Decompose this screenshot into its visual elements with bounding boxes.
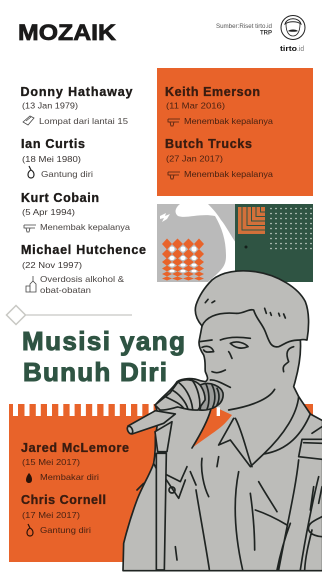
entry: Chris Cornell: Gantung diri: [40, 525, 91, 535]
ear: [283, 347, 294, 372]
entry: Butch Trucks: Menembak kepalanya: [184, 169, 273, 179]
entry: Donny Hathaway: (13 Jan 1979): [22, 100, 78, 110]
microphone: [128, 411, 175, 434]
entry: Keith Emerson: [165, 85, 273, 126]
green square: [235, 204, 313, 282]
icon: flame: [26, 473, 32, 483]
face: [199, 337, 250, 387]
entry: Butch Trucks: (27 Jan 2017): [166, 154, 223, 164]
hair line: [202, 310, 300, 347]
entry: Jared McLemore: (15 Mei 2017): [22, 457, 80, 467]
title: Musisi yang: [22, 326, 185, 356]
divider with diamond: [6, 306, 132, 324]
panel: bottom orange: [9, 404, 313, 562]
shirt folds: [137, 457, 322, 570]
icon: noose: [28, 166, 34, 178]
title: [22, 326, 185, 387]
entry: Butch Trucks: [165, 137, 273, 179]
orange gap between arm and collar: [192, 407, 232, 448]
title: Bunuh Diri: [23, 357, 167, 387]
tirto logo: [280, 16, 305, 53]
entry: Donny Hathaway: [20, 85, 133, 126]
hair strands: [205, 299, 285, 318]
entry: Jared McLemore: [21, 441, 129, 483]
entry: Keith Emerson: Keith Emerson: [165, 85, 260, 99]
entry: Kurt Cobain: [21, 191, 130, 232]
tirto logo: tirto: [280, 44, 297, 53]
entry: Kurt Cobain: Kurt Cobain: [21, 191, 99, 205]
source credit: [216, 23, 273, 36]
tirto logo: .id: [297, 44, 304, 53]
entry: Ian Curtis: [21, 137, 93, 179]
entry: Michael Hutchence: Michael Hutchence: [21, 243, 146, 257]
icon: building: [23, 116, 34, 125]
entry: Michael Hutchence: [21, 243, 146, 295]
source credit: Sumber:Riset tirto.id: [216, 23, 273, 30]
entry: Butch Trucks: Butch Trucks: [165, 137, 252, 151]
entry: Keith Emerson: Menembak kepalanya: [184, 116, 273, 126]
brand wordmark: MOZAIK: [18, 20, 116, 45]
entry: Ian Curtis: Ian Curtis: [21, 137, 85, 151]
panel: top orange: [157, 68, 313, 196]
entry: Michael Hutchence: Overdosis alkohol &: [40, 274, 124, 284]
icon: noose: [27, 524, 33, 536]
entry: Donny Hathaway: Lompat dari lantai 15: [39, 116, 128, 126]
entry: Michael Hutchence: (22 Nov 1997): [22, 260, 82, 270]
microphone stand: [156, 453, 166, 570]
entry: Chris Cornell: Chris Cornell: [21, 493, 106, 507]
entry: Ian Curtis: Gantung diri: [41, 169, 93, 179]
entry: Kurt Cobain: Menembak kepalanya: [40, 222, 130, 232]
sleeve cuff: [154, 463, 187, 498]
entry: Chris Cornell: [21, 493, 106, 536]
orange nested squares: [238, 207, 265, 234]
hand: [155, 380, 205, 410]
entry: Ian Curtis: (18 Mei 1980): [22, 154, 81, 164]
jaw: [229, 389, 275, 410]
collage: grey shapes and patterns: [157, 204, 314, 282]
icon: gun: [24, 225, 36, 232]
dot grid: [268, 206, 314, 251]
icon: bottles: [26, 276, 36, 292]
source credit: TRP: [260, 30, 272, 36]
entry: Jared McLemore: Membakar diri: [40, 472, 99, 482]
collar: [219, 397, 310, 467]
entry: Jared McLemore: Jared McLemore: [21, 441, 129, 455]
entry: Chris Cornell: (17 Mei 2017): [22, 510, 80, 520]
silhouette: [123, 271, 322, 571]
strap: [299, 427, 322, 459]
entry: Kurt Cobain: (5 Apr 1994): [22, 207, 75, 217]
orange diamond pattern: [162, 238, 204, 280]
entry: Donny Hathaway: Donny Hathaway: [20, 85, 133, 99]
illustration: singer with microphone: [123, 271, 322, 571]
entry: Keith Emerson: (11 Mar 2016): [166, 100, 225, 110]
entry: Michael Hutchence: obat-obatan: [40, 285, 91, 295]
